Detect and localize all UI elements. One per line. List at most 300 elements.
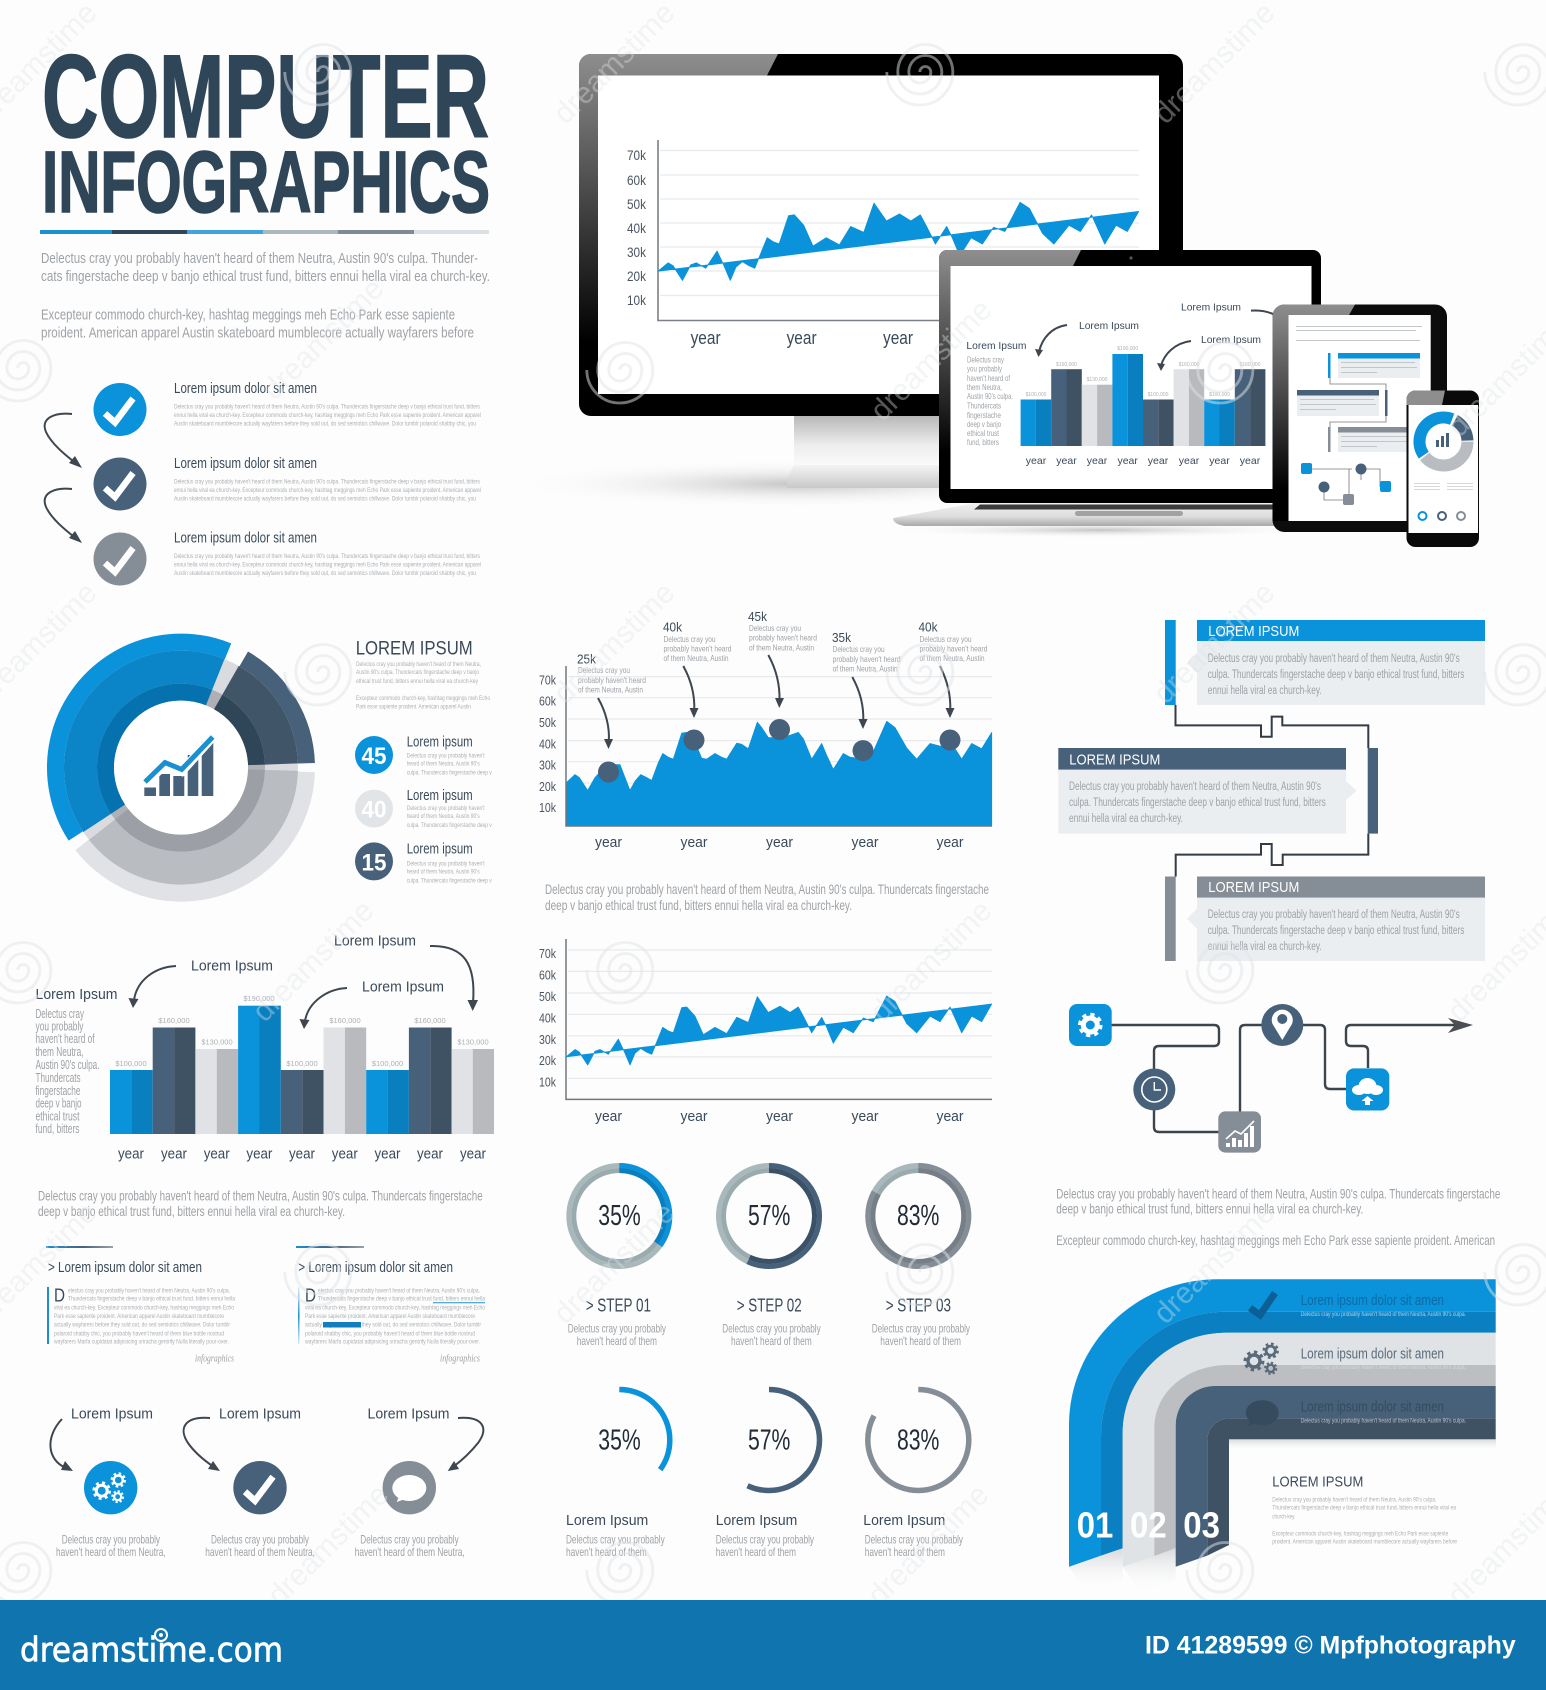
laptop bar chart: year xyxy=(1209,455,1230,467)
laptop callouts xyxy=(966,302,1280,447)
ribbon row three: Delectus cray you probably haven't heard of them Neutra, Austin 90's culpa. xyxy=(1301,1417,1466,1424)
laptop frame xyxy=(939,250,1321,503)
monitor frame xyxy=(579,54,1183,416)
x axis labels: year xyxy=(766,834,793,851)
icon: rising chart xyxy=(144,737,213,796)
legend description: Excepteur commodo church-key, hashtag meggings meh Echo xyxy=(356,695,490,702)
intro text: Excepteur commodo church-key, hashtag meggings meh Echo Park esse sapiente xyxy=(41,308,455,324)
progress ring 83: haven't heard of them xyxy=(880,1334,961,1348)
bar year labels: year xyxy=(118,1146,144,1163)
icon: clock xyxy=(1133,1068,1175,1110)
intro text: cats fingerstache deep v banjo ethical trust fund, bitters ennui hella viral ea church-key. xyxy=(41,269,490,285)
progress ring 35: 35% xyxy=(598,1200,641,1232)
infographic canvas: dreamstime xyxy=(246,894,380,1028)
checklist item three: Austin skateboard mumblecore actually wayfarers before they sold out, do sed semiotics chillwave. Dolor tumblr polaroid shabby chic, you xyxy=(174,570,476,577)
callout 35k: 35k xyxy=(832,630,851,645)
laptop bar chart: $130,000 xyxy=(1087,377,1108,383)
bar value labels: $130,000 xyxy=(457,1038,489,1046)
progress ring 57: Delectus cray you probably xyxy=(722,1322,821,1336)
bar chart panel xyxy=(36,933,494,1163)
laptop callouts: fund, bitters xyxy=(967,437,999,447)
donut chart xyxy=(7,594,355,941)
bar side description: them Neutra, xyxy=(36,1045,84,1059)
article block right: actually wayfarers before they sold out, do sed semiotics chillwave. Dolor tumblr xyxy=(305,1322,482,1329)
article block right: > Lorem ipsum dolor sit amen xyxy=(298,1259,453,1276)
tablet frame xyxy=(1272,304,1447,532)
legend item 15: culpa. Thundercats fingerstache deep v xyxy=(407,877,492,884)
bar year labels: year xyxy=(246,1146,272,1163)
flow box two: culpa. Thundercats fingerstache deep v banjo ethical trust fund, bitters xyxy=(1069,797,1326,809)
legend item 45: Delectus cray you probably haven't xyxy=(407,753,485,760)
callout 45k xyxy=(748,609,817,708)
progress ring 83: Delectus cray you probably xyxy=(872,1322,970,1336)
paragraph below bar chart xyxy=(38,1188,483,1219)
ribbon row one xyxy=(1250,1292,1466,1318)
icon callout: speech: Lorem Ipsum xyxy=(368,1405,450,1422)
infographic canvas: dreamstime xyxy=(547,0,681,130)
article block right: Park esse sapiente proident. American apparel Austin skateboard mumblecore xyxy=(305,1313,475,1320)
checklist item one xyxy=(174,380,481,428)
thin ring 83 xyxy=(863,1390,969,1559)
thin ring 83: 83% xyxy=(897,1424,939,1456)
progress ring 35 xyxy=(568,1166,670,1348)
progress ring 57 xyxy=(718,1166,821,1348)
ribbon text block: Excepteur commodo church-key, hashtag meggings meh Echo Park esse sapiente xyxy=(1272,1530,1449,1537)
legend description xyxy=(356,661,490,710)
checklist item one: ennui hella viral ea church-key. Excepteur commodo church-key, hashtag meggings meh Echo Park esse sapiente proident. American apparel xyxy=(174,412,481,419)
callout 40k: 40k xyxy=(663,619,682,634)
laptop callouts: them Neutra, xyxy=(967,382,1002,392)
title colour rule xyxy=(40,230,489,234)
infographic canvas: dreamstime xyxy=(864,293,998,427)
intro text: proident. American apparel Austin skateboard mumblecore actually wayfarers before xyxy=(41,326,474,342)
icon: gear xyxy=(1069,1004,1112,1046)
laptop bar chart: $190,000 xyxy=(1117,346,1138,352)
title: INFOGRAPHICS xyxy=(42,134,490,231)
callout 35k: of them Neutra, Austin xyxy=(833,663,898,673)
ribbon numbers xyxy=(1077,1504,1220,1545)
icon callout: check: haven't heard of them Neutra, xyxy=(205,1545,315,1559)
intro text xyxy=(41,251,490,342)
callout 40k: probably haven't heard xyxy=(664,643,732,653)
grid xyxy=(568,677,992,804)
x axis labels: year xyxy=(936,834,964,851)
infographic canvas: dreamstime xyxy=(547,576,681,710)
monitor stand xyxy=(787,416,944,488)
flow box two: Delectus cray you probably haven't heard of them Neutra, Austin 90's xyxy=(1069,781,1321,793)
right paragraph: deep v banjo ethical trust fund, bitters ennui hella viral ea church-key. xyxy=(1056,1201,1363,1217)
checklist item two: Austin skateboard mumblecore actually wayfarers before they sold out, do sed semiotics chillwave. Dolor tumblr polaroid shabby chic, you xyxy=(174,496,476,502)
callout 40k xyxy=(663,619,732,718)
article block right: Thundercats fingerstache deep v banjo ethical trust fund, bitters ennui hella xyxy=(318,1296,485,1303)
flow box one: LOREM IPSUM xyxy=(1208,623,1299,640)
monitor area chart: 70k xyxy=(627,147,647,163)
callout 25k: Delectus cray you xyxy=(578,665,630,675)
bar arrow three xyxy=(430,946,478,1011)
bar side description: you probably xyxy=(36,1020,84,1034)
bar year labels xyxy=(118,1146,486,1163)
laptop callouts: fingerstache xyxy=(967,410,1001,420)
callout 40k right: probably haven't heard xyxy=(920,643,988,653)
thin ring 83: Delectus cray you probably xyxy=(865,1532,963,1546)
arrow two xyxy=(45,489,82,543)
callout 25k: probably haven't heard xyxy=(578,675,646,685)
laptop bar chart: $100,000 xyxy=(1148,392,1169,398)
icon callout: gears: Lorem Ipsum xyxy=(71,1405,153,1422)
laptop bar chart: year xyxy=(1179,455,1200,467)
laptop base xyxy=(880,503,1320,538)
donut legend xyxy=(355,638,492,884)
article block left: infographics xyxy=(195,1353,234,1365)
icon callout: gears: Delectus cray you probably xyxy=(62,1532,160,1546)
bar callout labels: Lorem Ipsum xyxy=(191,958,273,974)
article block right: viral ea church-key. Excepteur commodo church-key, hashtag meggings meh Echo xyxy=(305,1304,485,1311)
bar side description: ethical trust xyxy=(36,1110,80,1124)
bar arrow one xyxy=(128,966,176,1008)
bar side description: Delectus cray xyxy=(36,1007,84,1021)
flow boxes connectors xyxy=(1176,705,1368,876)
icon: cloud upload xyxy=(1346,1068,1389,1110)
callout 40k: Delectus cray you xyxy=(664,634,716,644)
monitor area chart: 60k xyxy=(627,172,647,188)
bar value labels xyxy=(115,994,489,1068)
thin ring 35: Lorem Ipsum xyxy=(566,1512,648,1529)
monitor area chart: 20k xyxy=(627,268,647,284)
infographic canvas: dreamstime xyxy=(256,272,390,406)
ribbon row two: Lorem ipsum dolor sit amen xyxy=(1301,1345,1444,1362)
progress ring 83: > STEP 03 xyxy=(886,1296,951,1316)
x axis labels: year xyxy=(852,834,878,851)
legend item 45: 45 xyxy=(362,743,386,770)
bar side description: deep v banjo xyxy=(36,1096,82,1110)
wave y axis labels: 10k xyxy=(539,1074,556,1089)
monitor area chart: year xyxy=(883,328,913,348)
monitor area chart: year xyxy=(787,328,817,348)
legend heading: LOREM IPSUM xyxy=(356,638,473,659)
ribbon dark xyxy=(1176,1386,1496,1567)
bar arrow two xyxy=(300,988,347,1029)
flow box three: ennui hella viral ea church-key. xyxy=(1208,941,1322,953)
wave y axis labels: 40k xyxy=(539,1010,556,1025)
footer bar xyxy=(0,1600,1546,1690)
thin ring 35: Delectus cray you probably xyxy=(566,1532,665,1546)
monitor area chart: 50k xyxy=(627,196,647,212)
flow box two: LOREM IPSUM xyxy=(1069,752,1160,768)
peak markers xyxy=(598,719,960,782)
bar value labels: $100,000 xyxy=(286,1059,318,1068)
footer id credit: ID 41289599 © Mpfphotography xyxy=(1145,1631,1516,1659)
monitor area chart: year xyxy=(691,328,721,348)
tablet xyxy=(1272,304,1447,532)
article block right: D xyxy=(305,1286,316,1306)
article block left: wayfarers Marfa cupidatat adipisicing sriracha gentrify Nulla literally pour-over. xyxy=(53,1339,229,1346)
y axis labels xyxy=(539,673,556,815)
legend description: Park esse sapiente proident. American apparel Austin xyxy=(356,703,471,710)
bar side description: fingerstache xyxy=(36,1084,81,1098)
infographic canvas: dreamstime xyxy=(547,1196,681,1330)
callout 40k right: of them Neutra, Austin xyxy=(920,653,985,663)
article block left: electus cray you probably haven't heard of them Neutra, Austin 90's culpa. xyxy=(68,1287,230,1294)
laptop bar chart: year xyxy=(1240,455,1261,467)
area chart with callouts xyxy=(539,609,992,851)
legend item 40 xyxy=(355,787,492,829)
article block left: Park esse sapiente proident. American apparel Austin skateboard mumblecore xyxy=(54,1313,224,1320)
ribbon text block: Thundercats fingerstache deep v banjo ethical trust fund, bitters ennui hella viral ea xyxy=(1272,1505,1456,1512)
article block left: > Lorem ipsum dolor sit amen xyxy=(48,1259,202,1276)
icon callout: speech xyxy=(355,1405,483,1559)
tablet screen content xyxy=(1296,326,1422,505)
wave x axis labels: year xyxy=(766,1108,793,1125)
legend item 45 xyxy=(355,734,492,776)
arrowhead xyxy=(1448,1018,1473,1033)
laptop bar chart: year xyxy=(1056,455,1077,467)
y axis labels: 40k xyxy=(539,737,556,752)
bar side description: haven't heard of xyxy=(36,1032,95,1046)
infographic canvas: dreamstime xyxy=(864,894,998,1028)
callout 25k: of them Neutra, Austin xyxy=(578,684,643,694)
checklist item two: Lorem ipsum dolor sit amen xyxy=(174,455,317,472)
flow box one: ennui hella viral ea church-key. xyxy=(1208,685,1322,697)
callout 25k: 25k xyxy=(577,652,596,667)
legend item 45: heard of them Neutra, Austin 90's xyxy=(407,761,480,768)
checklist item one: Delectus cray you probably haven't heard of them Neutra, Austin 90's culpa. Thundercats fingerstache deep v banjo ethical trust fund, bitters xyxy=(174,404,481,411)
article block left: actually wayfarers before they sold out, do sed semiotics chillwave. Dolor tumblr xyxy=(54,1322,231,1329)
check icon slate xyxy=(94,458,146,510)
icon: gears xyxy=(94,1473,125,1502)
ribbon row one: Lorem ipsum dolor sit amen xyxy=(1301,1292,1444,1309)
ribbon numbers: 01 xyxy=(1077,1504,1113,1545)
y axis labels: 10k xyxy=(539,800,556,815)
infographic canvas: dreamstime xyxy=(1147,1196,1281,1330)
laptop bar chart xyxy=(1021,346,1265,467)
laptop bar chart: $100,000 xyxy=(1209,392,1230,398)
laptop callouts: Austin 90's culpa. xyxy=(967,391,1013,401)
legend item 45: culpa. Thundercats fingerstache deep v xyxy=(407,770,492,776)
progress ring 83 xyxy=(868,1166,970,1348)
article block right: electus cray you probably haven't heard of them Neutra, Austin 90's culpa. xyxy=(318,1287,480,1294)
checklist item three: Lorem ipsum dolor sit amen xyxy=(174,530,317,546)
flow box three: LOREM IPSUM xyxy=(1208,879,1299,896)
thin ring 57: Lorem Ipsum xyxy=(716,1512,797,1529)
legend item 40: 40 xyxy=(362,797,386,824)
ribbon text block: LOREM IPSUM xyxy=(1272,1474,1363,1491)
flow box one xyxy=(1165,620,1485,705)
x axis labels: year xyxy=(595,834,622,851)
checklist item two xyxy=(174,455,481,502)
thin ring 57: haven't heard of them xyxy=(716,1545,796,1559)
bar side description xyxy=(36,1007,100,1136)
bar year labels: year xyxy=(417,1146,443,1163)
ribbon text block: Delectus cray you probably haven't heard of them Neutra, Austin 90's culpa. xyxy=(1272,1496,1436,1503)
laptop callouts: ethical trust xyxy=(967,428,999,438)
legend item 15: 15 xyxy=(362,849,386,876)
donut segment: grey xyxy=(51,638,311,897)
progress ring 57: haven't heard of them xyxy=(731,1334,812,1348)
wave y axis labels: 20k xyxy=(539,1053,556,1068)
phone small items xyxy=(1414,483,1473,520)
intro text: Delectus cray you probably haven't heard of them Neutra, Austin 90's culpa. Thunder- xyxy=(41,251,478,267)
callout 35k xyxy=(832,630,901,729)
filled area xyxy=(566,721,992,826)
article block left: D xyxy=(54,1286,65,1306)
y axis labels: 60k xyxy=(539,694,556,709)
device shadow xyxy=(510,460,1090,508)
ribbon blue xyxy=(1069,1279,1496,1567)
progress ring 57: > STEP 02 xyxy=(737,1296,802,1316)
y axis labels: 50k xyxy=(539,715,556,730)
laptop bar chart: year xyxy=(1148,455,1169,467)
laptop bar chart: $160,000 xyxy=(1056,362,1077,368)
callout 45k: probably haven't heard xyxy=(749,633,817,643)
icon callout: check: Lorem Ipsum xyxy=(219,1405,301,1422)
laptop bar chart: year xyxy=(1087,455,1108,467)
ribbon text block: church-key. xyxy=(1272,1513,1295,1520)
article block left: Thundercats fingerstache deep v banjo ethical trust fund, bitters ennui hella xyxy=(68,1296,235,1303)
legend description: ethical trust fund, bitters ennui hella viral ea church-key xyxy=(356,678,479,685)
laptop callouts: Thundercats xyxy=(967,400,1001,410)
bar year labels: year xyxy=(204,1146,230,1163)
callout 35k: Delectus cray you xyxy=(833,644,885,654)
checklist item three: ennui hella viral ea church-key. Excepteur commodo church-key, hashtag meggings meh Echo Park esse sapiente proident. American apparel xyxy=(174,562,481,568)
bar value labels: $160,000 xyxy=(158,1016,190,1025)
ribbon light xyxy=(1123,1333,1496,1567)
thin ring 83: Lorem Ipsum xyxy=(863,1512,945,1529)
paragraph below bar chart: deep v banjo ethical trust fund, bitters ennui hella viral ea church-key. xyxy=(38,1203,345,1219)
wave x axis labels: year xyxy=(936,1108,964,1125)
thin ring 57: 57% xyxy=(748,1424,790,1456)
article block right: wayfarers Marfa cupidatat adipisicing sriracha gentrify Nulla literally pour-over. xyxy=(304,1339,480,1346)
icon callout: speech: haven't heard of them Neutra, xyxy=(355,1545,465,1559)
infographic canvas: dreamstime xyxy=(1147,576,1281,710)
wave y axis labels xyxy=(539,946,556,1089)
laptop callouts: Delectus cray xyxy=(967,354,1005,364)
flow box two: ennui hella viral ea church-key. xyxy=(1069,813,1183,825)
callout 25k xyxy=(577,652,646,749)
legend item 15: Delectus cray you probably haven't xyxy=(407,861,485,868)
bar callout labels: Lorem Ipsum xyxy=(362,978,444,996)
phone donut xyxy=(1410,408,1477,475)
icon: map pin xyxy=(1261,1004,1303,1046)
y axis labels: 30k xyxy=(539,758,556,773)
monitor area chart: 10k xyxy=(627,292,647,308)
thin ring 83: haven't heard of them xyxy=(865,1545,945,1559)
checklist item two: ennui hella viral ea church-key. Excepteur commodo church-key, hashtag meggings meh Echo Park esse sapiente proident. American apparel xyxy=(174,487,481,494)
laptop callouts: Lorem Ipsum xyxy=(1079,320,1139,332)
checklist item three xyxy=(174,530,481,577)
legend item 40: culpa. Thundercats fingerstache deep v xyxy=(407,822,492,829)
ribbon panel xyxy=(1069,1279,1496,1592)
callout 40k: of them Neutra, Austin xyxy=(664,653,729,663)
ribbon numbers: 03 xyxy=(1183,1504,1220,1545)
progress ring 35: > STEP 01 xyxy=(586,1296,651,1316)
flow box three xyxy=(1165,876,1485,961)
callout 45k: Delectus cray you xyxy=(749,623,801,633)
right paragraph xyxy=(1056,1186,1500,1248)
laptop bar chart: $160,000 xyxy=(1179,362,1200,368)
bar side description: fund, bitters xyxy=(36,1122,80,1136)
bars xyxy=(110,1006,494,1134)
bar callout labels xyxy=(36,933,444,1003)
donut segment: slate xyxy=(10,596,352,939)
trend wave chart xyxy=(539,939,992,1125)
callout 45k: of them Neutra, Austin xyxy=(749,642,814,652)
progress ring 35: haven't heard of them xyxy=(577,1334,657,1348)
icon: speech bubble xyxy=(392,1475,426,1502)
laptop xyxy=(880,250,1321,538)
y axis labels: 70k xyxy=(539,673,556,688)
legend item 40: heard of them Neutra, Austin 90's xyxy=(407,813,480,820)
laptop bar chart: $160,000 xyxy=(1240,362,1261,368)
laptop bar chart: year xyxy=(1117,455,1138,467)
monitor xyxy=(579,54,1183,488)
bar callout labels: Lorem Ipsum xyxy=(36,986,118,1003)
checklist item one: Austin skateboard mumblecore actually wayfarers before they sold out, do sed semiotics chillwave. Dolor tumblr polaroid shabby chic, you xyxy=(174,420,476,428)
infographic canvas: dreamstime xyxy=(261,1478,395,1612)
icon: chart tile xyxy=(1218,1111,1261,1153)
donut segment: blue xyxy=(7,594,355,941)
legend item 40: Lorem ipsum xyxy=(407,787,473,804)
thin ring 35: haven't heard of them xyxy=(566,1545,647,1559)
laptop callouts: Lorem Ipsum xyxy=(966,340,1027,352)
progress ring 57: 57% xyxy=(748,1200,790,1232)
bar value labels: $160,000 xyxy=(414,1016,446,1025)
bar value labels: $100,000 xyxy=(115,1059,147,1068)
legend description: Austin 90's culpa. Thundercats fingerstache deep v banjo xyxy=(356,669,479,676)
thin ring 35 xyxy=(566,1390,670,1559)
bar callout labels: Lorem Ipsum xyxy=(334,933,416,950)
wave y axis labels: 60k xyxy=(539,967,556,982)
icon: check xyxy=(245,1477,273,1501)
progress ring 83: 83% xyxy=(897,1200,939,1232)
bar year labels: year xyxy=(374,1146,400,1163)
y axis labels: 20k xyxy=(539,779,556,794)
arrow one xyxy=(45,414,82,468)
paragraph below bar chart: Delectus cray you probably haven't heard of them Neutra, Austin 90's culpa. Thundercats fingerstache xyxy=(38,1188,483,1204)
bar year labels: year xyxy=(161,1146,187,1163)
middle paragraph: Delectus cray you probably haven't heard of them Neutra, Austin 90's culpa. Thundercats fingerstache xyxy=(545,881,989,897)
flow box two xyxy=(1058,748,1378,834)
ribbon text block: proident. American apparel Austin skateboard mumblecore actually wayfarers before xyxy=(1272,1539,1457,1546)
checklist item three: Delectus cray you probably haven't heard of them Neutra, Austin 90's culpa. Thundercats fingerstache deep v banjo ethical trust fund, bitters xyxy=(174,553,481,560)
legend item 40: Delectus cray you probably haven't xyxy=(407,805,485,812)
bar year labels: year xyxy=(460,1146,486,1163)
laptop callouts: you probably xyxy=(967,364,1003,374)
article block left: viral ea church-key. Excepteur commodo church-key, hashtag meggings meh Echo xyxy=(54,1304,234,1311)
laptop bar chart: $100,000 xyxy=(1026,392,1047,398)
thin ring 57 xyxy=(716,1390,820,1559)
legend description: Delectus cray you probably haven't heard of them Neutra, xyxy=(356,661,481,668)
legend item 15: Lorem ipsum xyxy=(407,840,473,857)
article block right: infographics xyxy=(440,1353,480,1365)
bar value labels: $130,000 xyxy=(201,1038,233,1046)
x axis labels: year xyxy=(680,834,708,851)
ribbon row one: Delectus cray you probably haven't heard of them Neutra, Austin 90's culpa. xyxy=(1301,1311,1466,1318)
icon callout: gears: haven't heard of them Neutra, xyxy=(56,1545,166,1559)
ribbon row three: Lorem ipsum dolor sit amen xyxy=(1301,1399,1444,1416)
ribbon numbers: 02 xyxy=(1130,1504,1167,1545)
flow lines xyxy=(1111,1025,1455,1132)
infographic canvas: dreamstime xyxy=(861,1478,995,1612)
bar year labels: year xyxy=(289,1146,315,1163)
checklist panel xyxy=(45,380,481,586)
laptop callouts: deep v banjo xyxy=(967,419,1001,429)
callout 40k right: 40k xyxy=(918,619,938,634)
wave y axis labels: 30k xyxy=(539,1032,556,1047)
article block left: polaroid shabby chic, you probably haven't heard of them blue bottle nostrud xyxy=(54,1330,224,1337)
wave y axis labels: 70k xyxy=(539,946,556,961)
wave x axis labels xyxy=(595,1108,964,1125)
icon callout: speech: Delectus cray you probably xyxy=(360,1532,459,1546)
